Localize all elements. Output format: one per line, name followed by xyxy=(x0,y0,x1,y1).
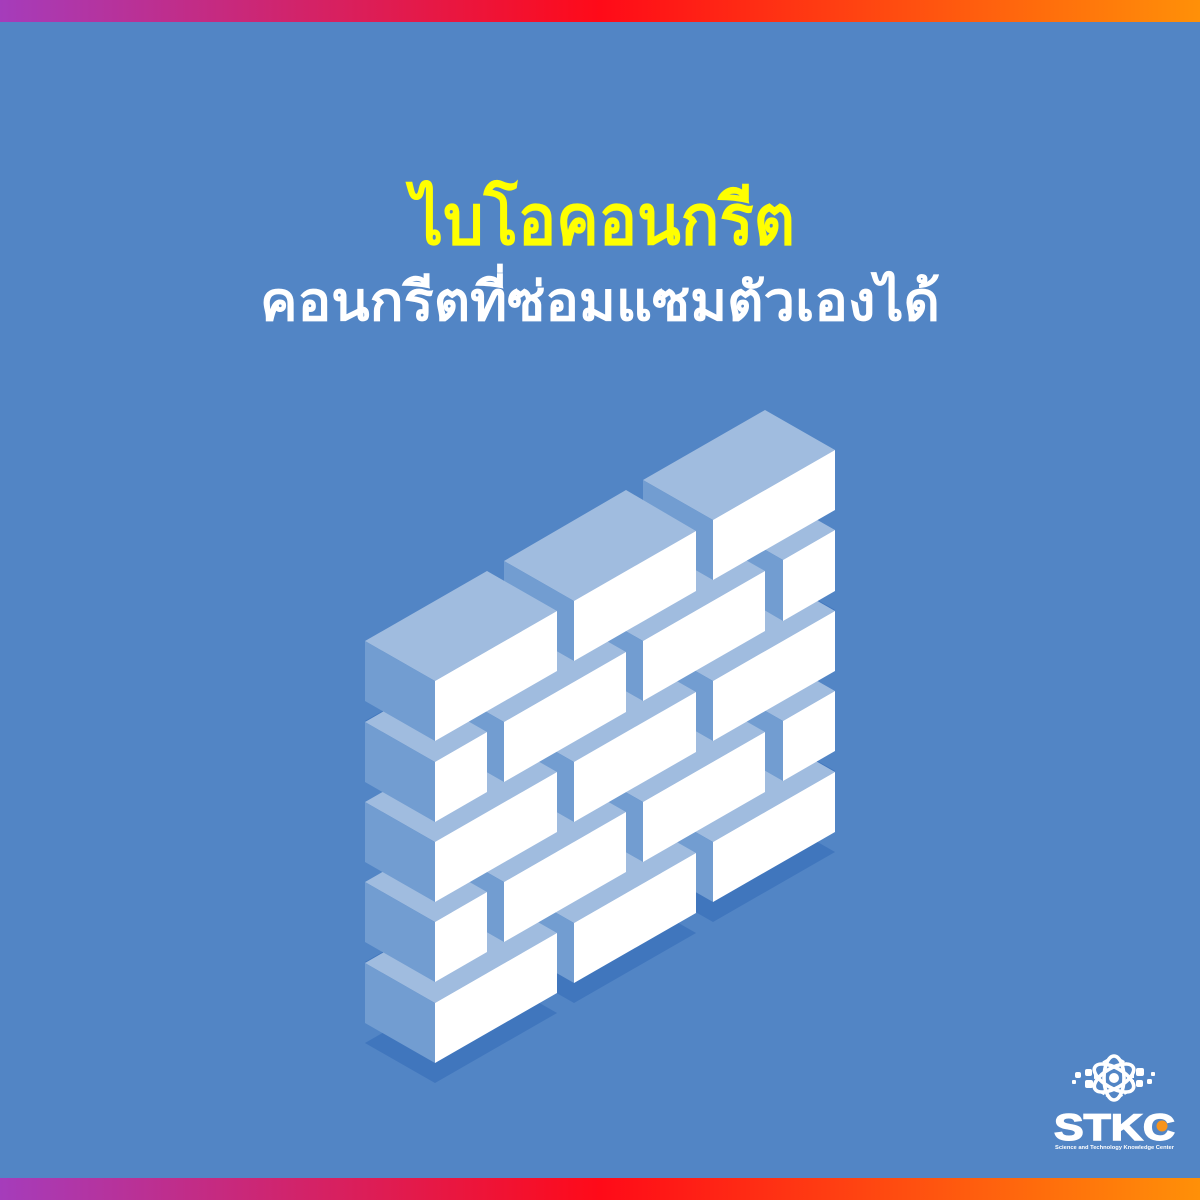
brick row 4 xyxy=(365,651,835,982)
logo wordmark: STKC xyxy=(1054,1107,1175,1148)
bottom gradient bar xyxy=(0,1178,1200,1200)
brick row 5 (bottom) xyxy=(365,732,835,1063)
STKC logo xyxy=(1054,1056,1175,1151)
icon: atom xyxy=(1090,1056,1138,1100)
brick row 3 xyxy=(365,571,835,902)
brick row 2 xyxy=(365,490,835,822)
wall cast shadows xyxy=(365,490,835,1083)
title: biocrete: ไบโอคอนกรีต xyxy=(405,179,795,259)
subtitle: self-healing concrete: คอนกรีตที่ซ่อมแซมตัวเองได้ xyxy=(260,263,940,332)
logo tagline: Science and Technology Knowledge Center xyxy=(1055,1145,1175,1151)
brick row 1 (top) xyxy=(365,410,835,741)
icon: data dots xyxy=(1072,1068,1155,1088)
top gradient bar xyxy=(0,0,1200,22)
brick wall illustration xyxy=(365,410,835,1083)
logo orange dot xyxy=(1156,1120,1168,1132)
